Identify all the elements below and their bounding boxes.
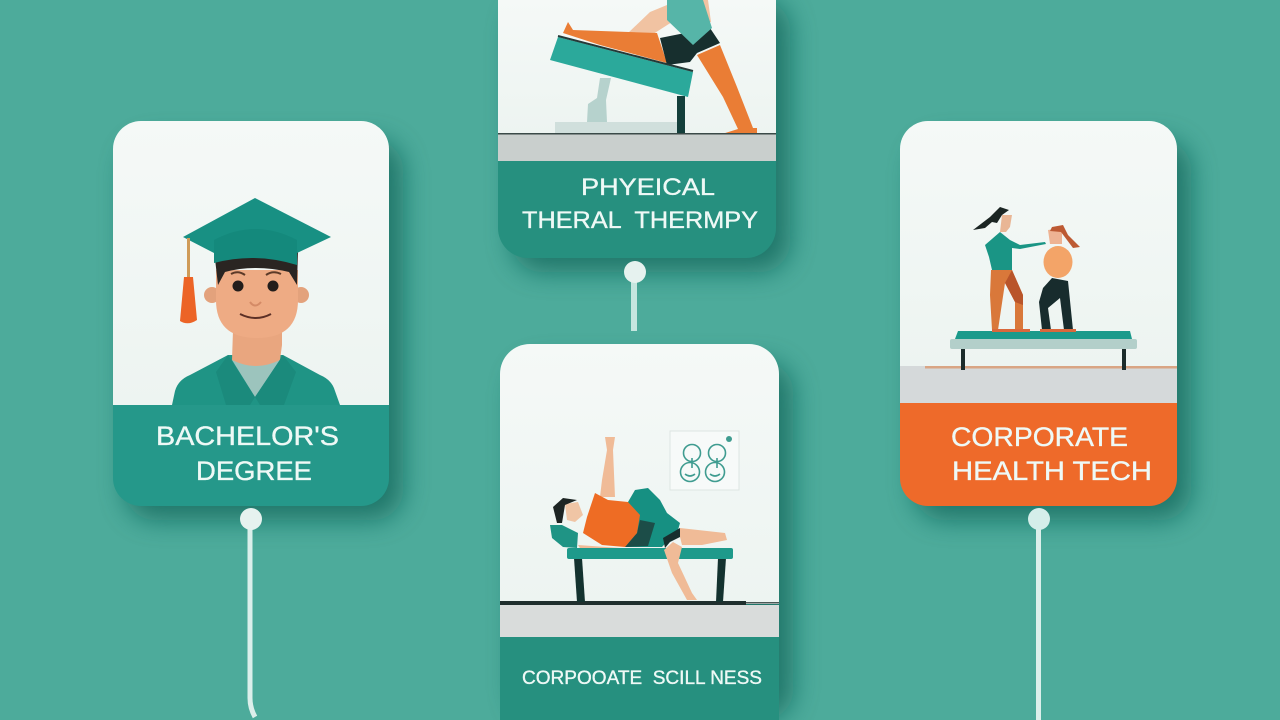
panel: bachelor's degree (113, 121, 389, 506)
label: corporate: CORPORATE (951, 422, 1128, 452)
connector: bachelor's degree pin (240, 508, 262, 717)
icon: graduate (172, 198, 340, 405)
panel: corporate wellness (500, 344, 779, 720)
illustration: two people on a bench (950, 207, 1137, 370)
connector: physical therapy pin (624, 261, 646, 331)
label: bachelor's degree: BACHELOR'S (156, 421, 339, 451)
connector: corporate health tech pin (1028, 508, 1050, 720)
panel: physical therapy (498, 0, 776, 258)
illustration: patient lying on bench (550, 437, 733, 602)
label: physical: PHYEICAL (581, 174, 715, 201)
label: therapy line: THERAL THERMPY (522, 207, 758, 234)
icon: wall chart (670, 431, 739, 490)
illustration: therapist stretching patient leg on bench (498, 0, 776, 134)
label: corporate wellness: CORPOOATE SCILL NESS (522, 668, 762, 689)
label: degree: DEGREE (196, 456, 312, 486)
panel: corporate health tech (900, 121, 1177, 506)
label: health tech: HEALTH TECH (952, 456, 1152, 486)
